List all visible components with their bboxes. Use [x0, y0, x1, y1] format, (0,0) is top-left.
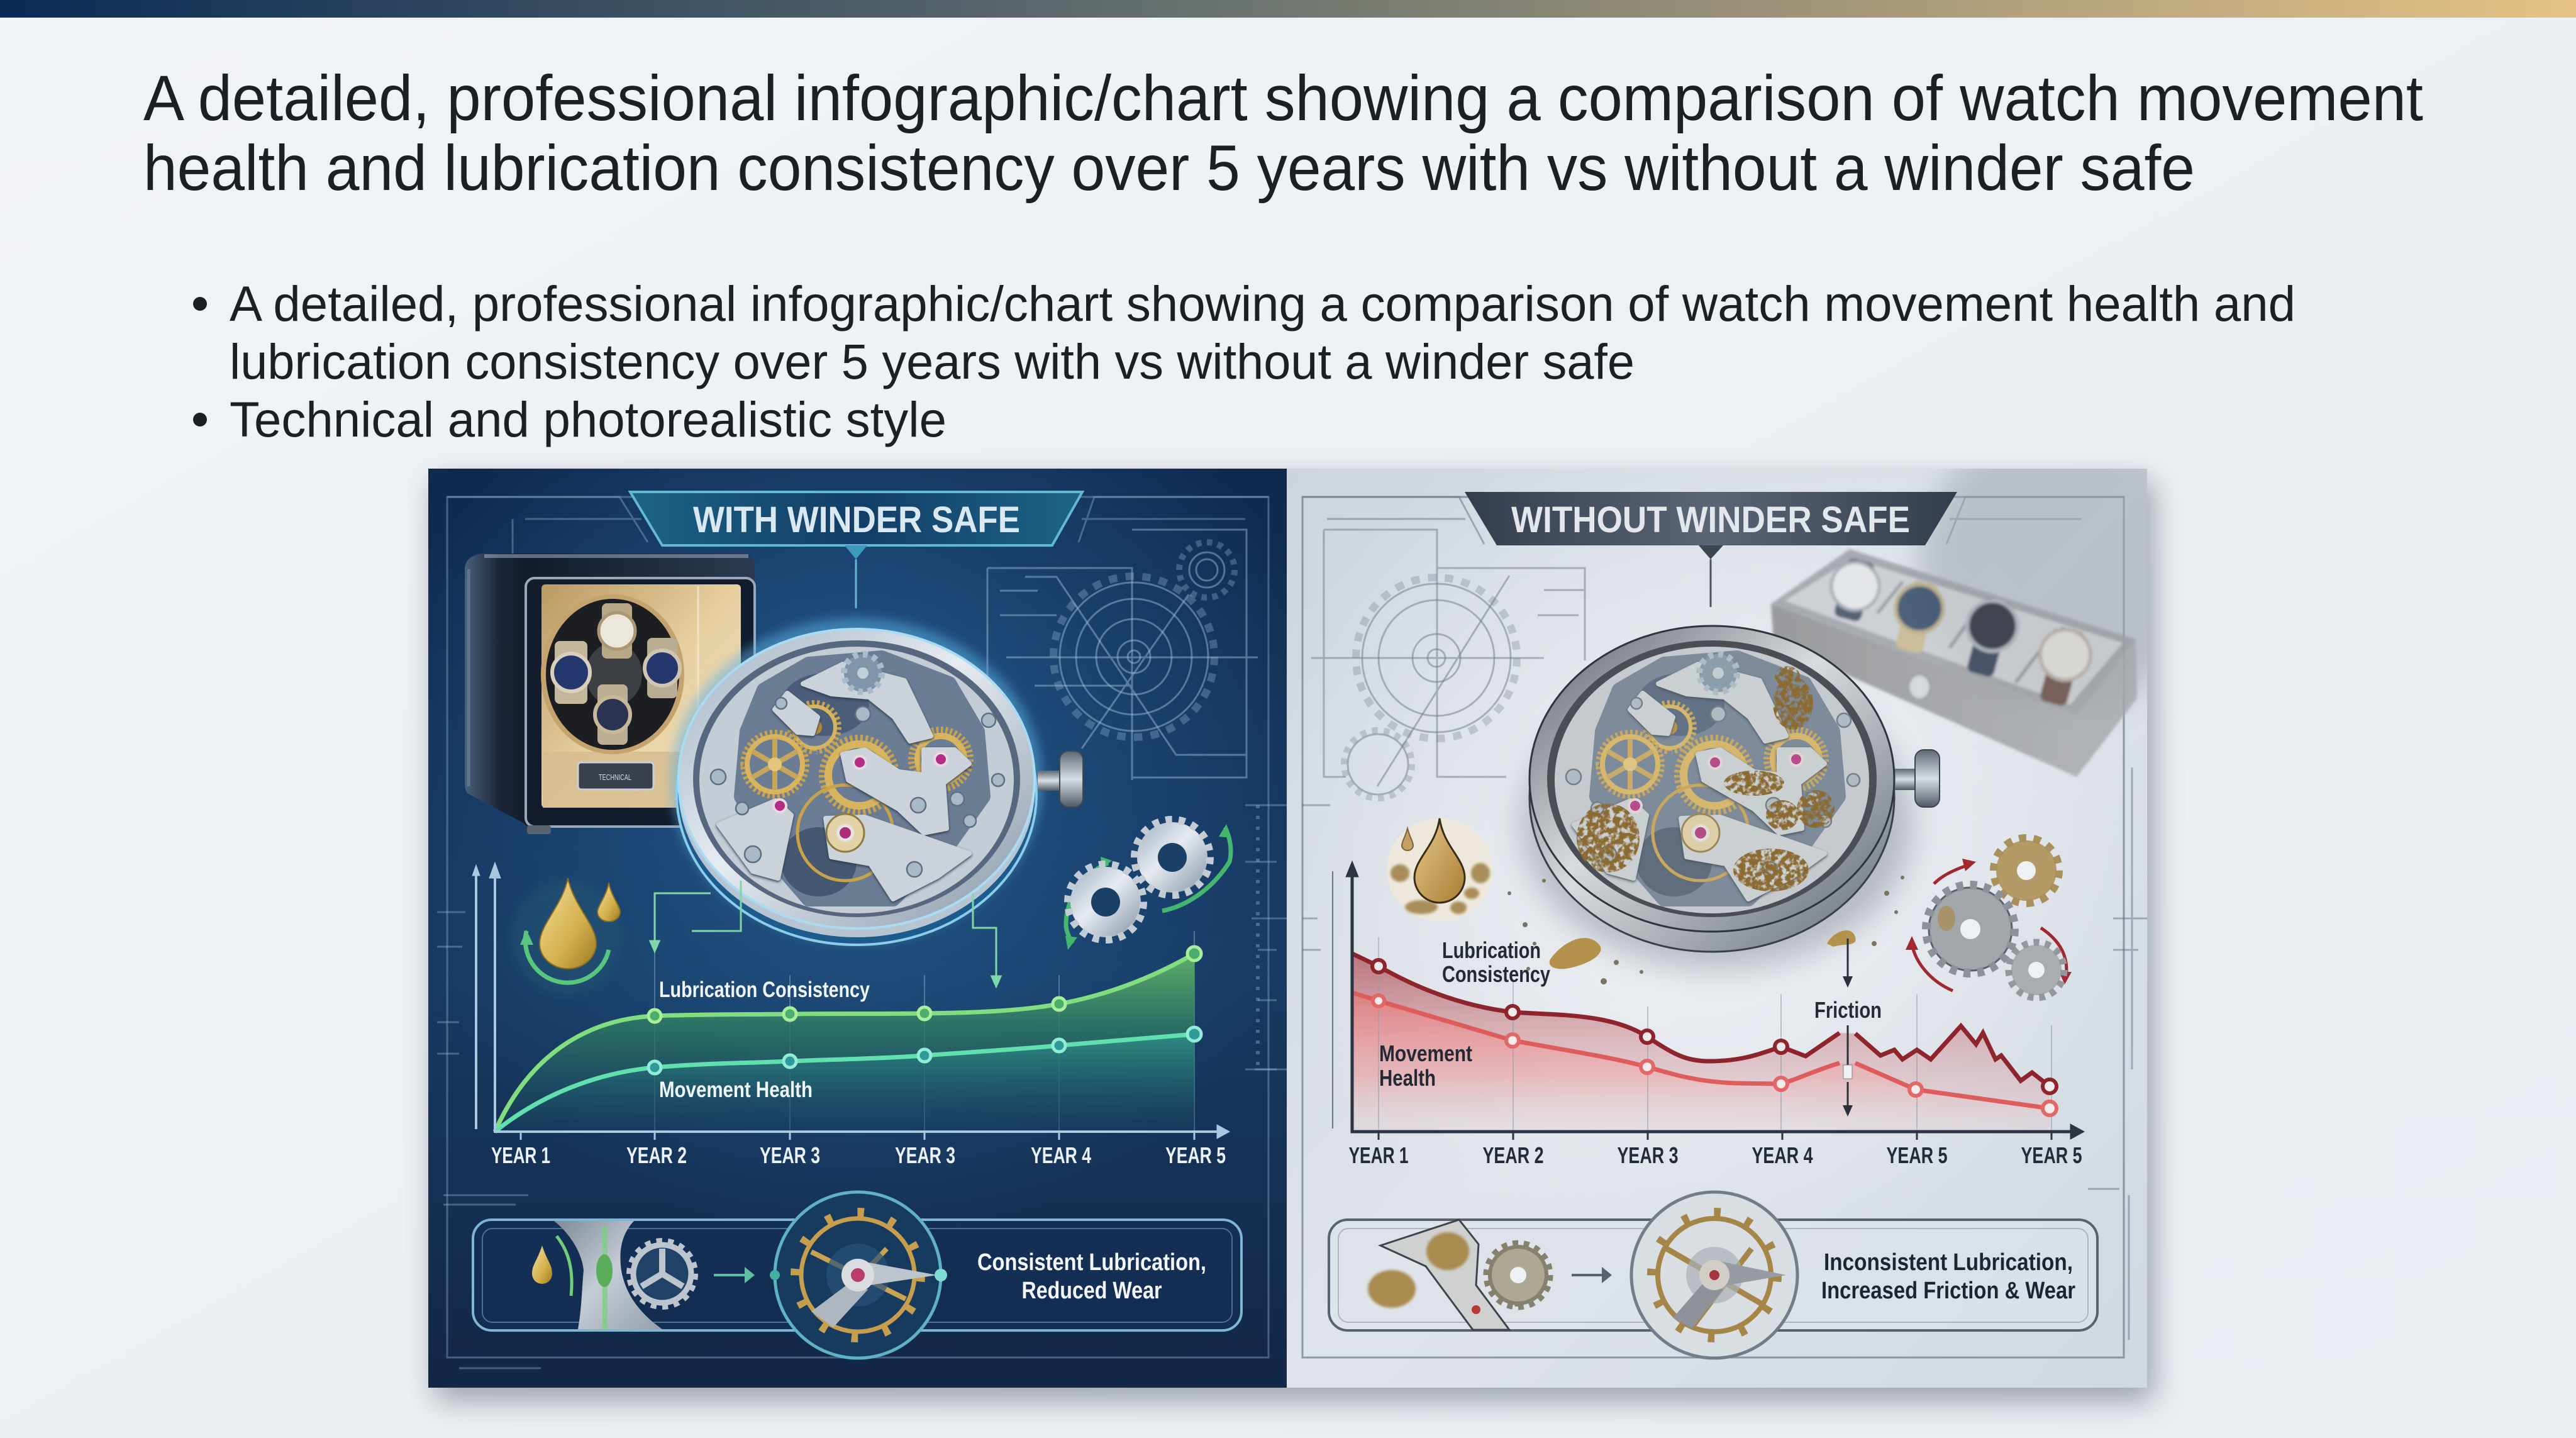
icon: oil drops, healthy	[511, 878, 621, 995]
callout text	[977, 1249, 1206, 1304]
x-axis labels	[491, 1142, 1226, 1168]
chart guide lines	[655, 931, 1194, 1132]
series labels: Lubrication Consistency	[659, 978, 870, 1002]
x-axis labels: YEAR 4	[1752, 1142, 1813, 1168]
series labels	[1379, 937, 1550, 1091]
x-axis labels: YEAR 1	[491, 1142, 550, 1168]
rust patches	[1577, 666, 1835, 891]
area: lubrication consistency	[495, 954, 1194, 1132]
data points: movement	[1373, 995, 2057, 1115]
series labels: Movement Health	[659, 1078, 813, 1102]
x-axis labels: YEAR 1	[1348, 1142, 1409, 1168]
scattered debris	[1507, 876, 1904, 984]
series labels: Health	[1379, 1065, 1436, 1091]
x-axis labels: YEAR 5	[1887, 1142, 1947, 1168]
banner: with winder safe	[630, 492, 1082, 608]
line: movement health	[495, 1034, 1194, 1132]
bullet 1	[193, 276, 2296, 389]
arrow	[714, 1267, 755, 1283]
x-axis labels: YEAR 2	[626, 1142, 687, 1168]
icon: watch movement, worn	[1522, 626, 1940, 969]
top gradient bar	[0, 0, 2576, 18]
illustration: oiled metal wedge	[554, 1221, 662, 1329]
blueprint gear drawing	[1311, 530, 1585, 798]
x-axis labels: YEAR 4	[1031, 1142, 1091, 1168]
bullet 2: Technical and photorealistic style	[230, 391, 947, 447]
illustration: worn metal	[1380, 1220, 1509, 1330]
icon: open watch box	[1771, 549, 2137, 777]
banner: with winder safe: WITH WINDER SAFE	[693, 499, 1020, 540]
area: movement health	[1352, 993, 2050, 1132]
chart: with winder safe	[472, 862, 1230, 1168]
banner: without winder safe	[1465, 492, 1957, 607]
friction marker: Friction	[1814, 997, 1882, 1023]
icon: worn gears with red arrows	[1906, 838, 2072, 998]
banner: without winder safe: WITHOUT WINDER SAFE	[1511, 499, 1910, 540]
panel: without winder safe	[1287, 469, 2147, 1388]
bullet 1: lubrication consistency over 5 years with vs without a winder safe	[230, 333, 1635, 389]
title: health and lubrication consistency over 5 years with vs without a winder safe	[143, 132, 2195, 204]
panel: with winder safe	[428, 469, 1289, 1388]
callout text: Consistent Lubrication,	[977, 1249, 1206, 1276]
icon: watch winder safe: TECHNICAL	[599, 772, 631, 782]
area: lubrication consistency	[1352, 954, 2050, 1132]
x-axis labels: YEAR 3	[1618, 1142, 1678, 1168]
x-axis labels: YEAR 5	[2021, 1142, 2082, 1168]
axes	[472, 862, 1230, 1140]
x-axis labels: YEAR 2	[1483, 1142, 1543, 1168]
title: A detailed, professional infographic/chart showing a comparison of watch movement	[143, 62, 2423, 134]
line: lubrication consistency	[495, 954, 1194, 1132]
line: movement health	[1352, 993, 2050, 1108]
bullet list	[193, 276, 2296, 447]
x-axis labels	[1348, 1142, 2082, 1168]
line: lubrication consistency	[1352, 954, 2050, 1086]
watches in box	[1831, 557, 2090, 707]
icon: worn gear	[1487, 1244, 1550, 1307]
friction marker	[1814, 939, 1882, 1117]
title	[143, 62, 2423, 204]
guide lines	[1379, 937, 2051, 1132]
data points: lubrication	[648, 947, 1201, 1022]
axes	[1333, 861, 2084, 1140]
chart: without winder safe	[1333, 861, 2084, 1168]
area: movement health	[495, 1034, 1194, 1132]
icon: clean gear	[630, 1241, 695, 1307]
series labels	[659, 978, 870, 1102]
data points: lubrication	[1372, 960, 2057, 1093]
callout text	[1821, 1249, 2075, 1304]
icon: degraded oil drops	[1387, 818, 1492, 922]
bullet 1: A detailed, professional infographic/chart showing a comparison of watch movement health and	[230, 276, 2296, 332]
series labels: Consistency	[1442, 961, 1550, 987]
callout text: Reduced Wear	[1021, 1278, 1162, 1304]
callout: consistent lubrication	[473, 1192, 1241, 1358]
medallion: balance wheel	[770, 1192, 947, 1358]
panel drop shadow	[435, 481, 2153, 1400]
x-axis labels: YEAR 3	[895, 1142, 955, 1168]
callout text: Inconsistent Lubrication,	[1824, 1249, 2073, 1276]
smoky shading behind watch box	[1908, 469, 2147, 702]
watches in winder	[552, 603, 680, 745]
icon: watch movement, healthy	[670, 618, 1083, 945]
callout: inconsistent lubrication	[1329, 1192, 2097, 1358]
blueprint gear drawing	[987, 530, 1258, 780]
icon: watch winder safe	[465, 554, 755, 834]
medallion: balance wheel, worn	[1631, 1192, 1797, 1358]
series labels: Movement	[1379, 1040, 1472, 1066]
x-axis labels: YEAR 3	[760, 1142, 820, 1168]
icon: clean gears with green arrows	[1065, 820, 1231, 950]
callout arrows from watch	[650, 881, 1001, 986]
series labels: Lubrication	[1442, 937, 1541, 963]
arrow	[1572, 1267, 1612, 1283]
x-axis labels: YEAR 5	[1165, 1142, 1226, 1168]
data points: movement	[648, 1027, 1201, 1074]
callout text: Increased Friction & Wear	[1821, 1278, 2075, 1304]
